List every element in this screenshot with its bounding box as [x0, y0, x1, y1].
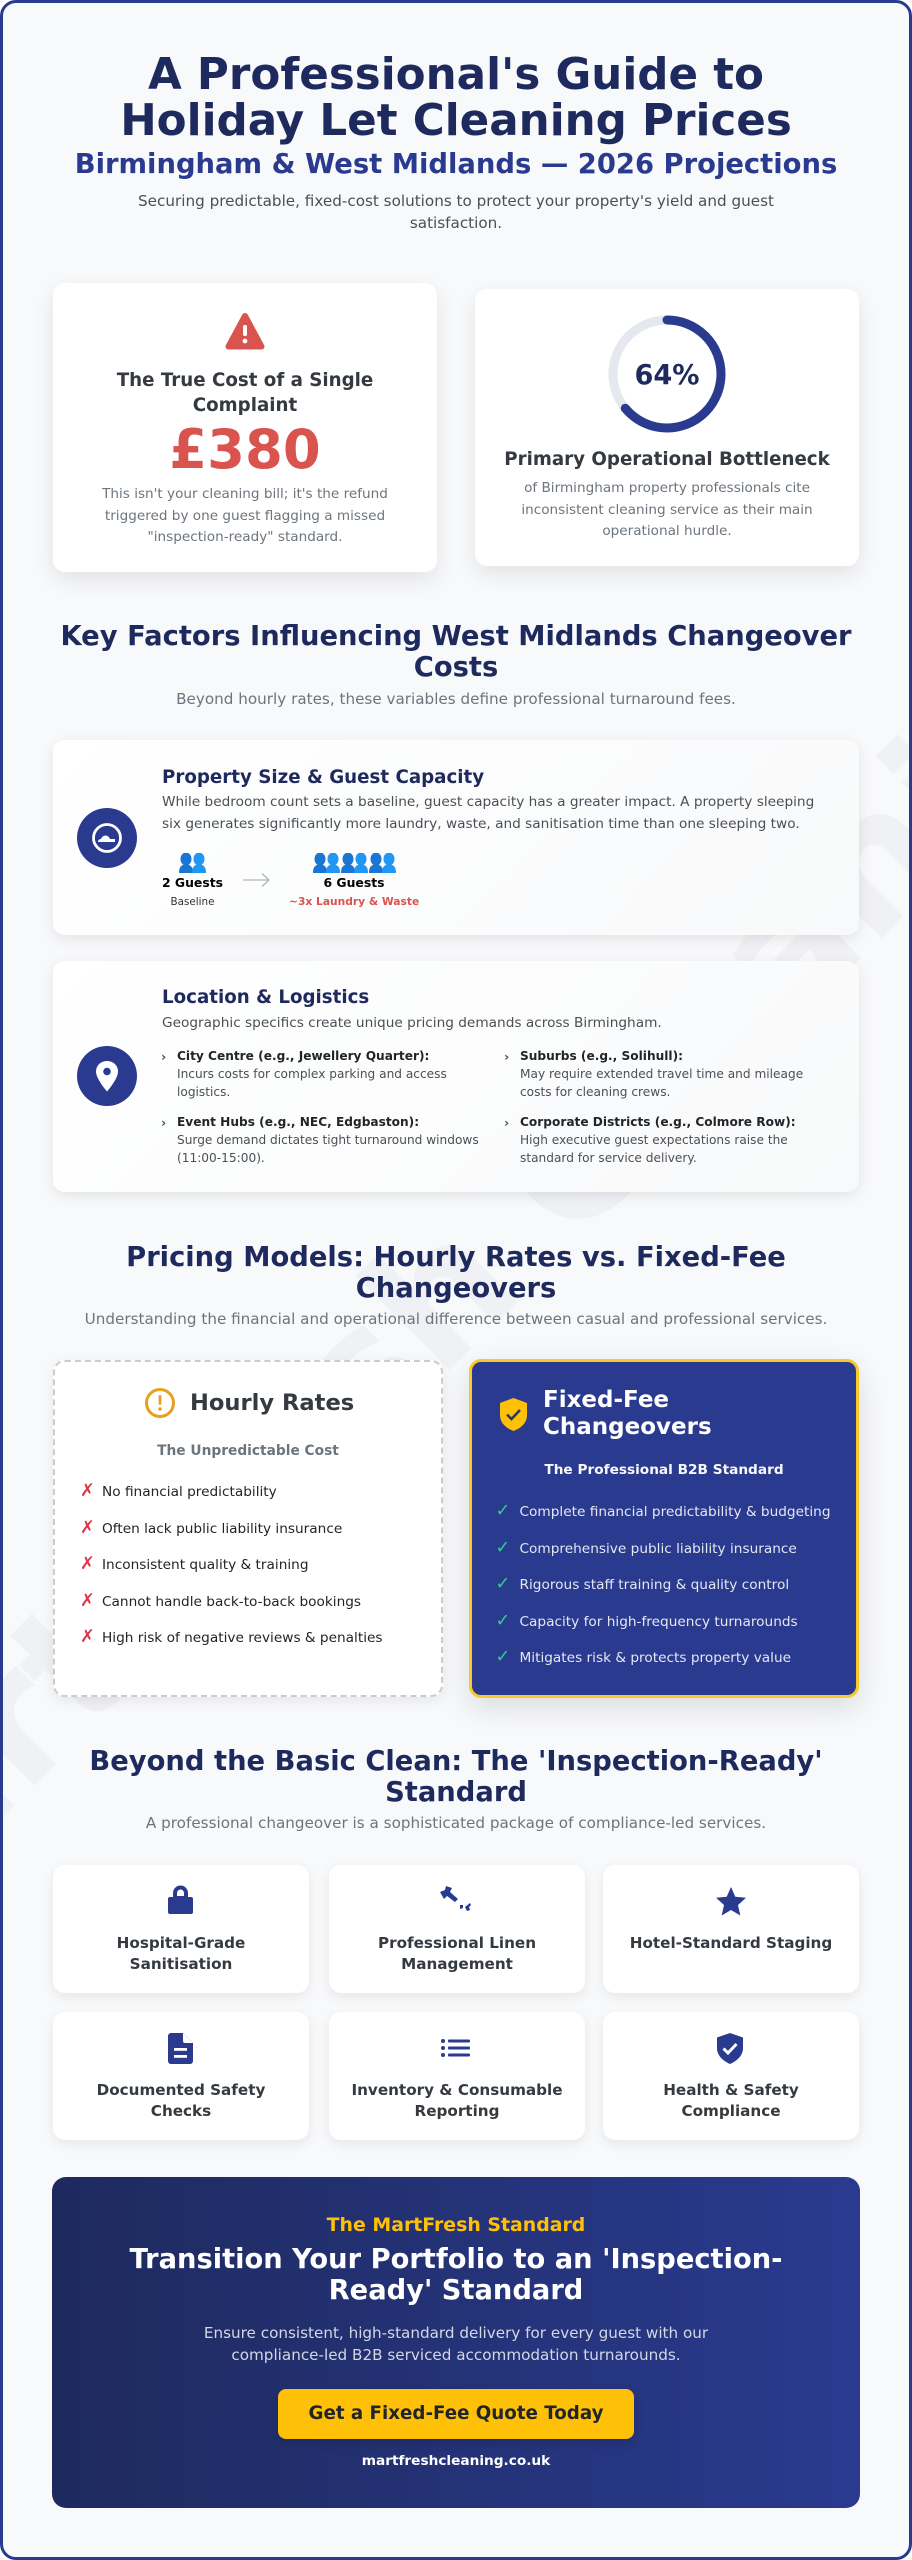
title: Holiday Let Cleaning Prices — [120, 96, 792, 146]
panel: bottleneck — [475, 289, 859, 566]
list: benefits: ✓ — [496, 1574, 510, 1594]
heading: Pricing Models: Hourly Rates vs. Fixed-Fee — [126, 1242, 786, 1273]
icon: bed circle — [77, 808, 137, 868]
card title: Fixed-Fee — [543, 1387, 669, 1413]
factor title: Location & Logistics — [162, 987, 369, 1008]
cta text — [52, 2323, 860, 2366]
subheading: Understanding the financial and operational difference between casual and professional services. — [85, 1310, 827, 1328]
button — [278, 2389, 634, 2439]
subheading: Beyond hourly rates, these variables define professional turnaround fees. — [176, 690, 736, 708]
service label: Documented Safety — [97, 2080, 265, 2098]
heading — [126, 1242, 786, 1304]
section heading: pricing models — [85, 1242, 827, 1328]
list: benefits — [496, 1501, 831, 1667]
donut chart 64%: 64% — [634, 360, 700, 391]
card heading — [116, 370, 373, 416]
bullet: city centre: logistics. — [177, 1085, 230, 1099]
card description: "inspection-ready" standard. — [148, 529, 342, 545]
heading — [60, 621, 852, 682]
card subtitle: The Unpredictable Cost — [157, 1443, 339, 1459]
card title: Hourly Rates — [190, 1390, 354, 1416]
drawback: High risk of negative reviews & penalties — [102, 1630, 383, 1646]
big number: £380 — [169, 418, 321, 481]
panel: location: › — [161, 1050, 166, 1065]
icon: map pin circle — [77, 1046, 137, 1106]
service label: Professional Linen — [378, 1934, 536, 1952]
icon: shield check — [500, 1398, 527, 1431]
header — [75, 50, 837, 232]
panel: location: › — [161, 1116, 166, 1131]
bullet: suburbs: costs for cleaning crews. — [520, 1085, 670, 1099]
label: 2 guests — [162, 875, 223, 908]
service label: Reporting — [415, 2102, 499, 2120]
section heading: inspection ready — [89, 1746, 823, 1832]
label: 2 guests: 2 Guests — [162, 875, 223, 890]
subheading: A professional changeover is a sophisticated package of compliance-led services. — [146, 1814, 766, 1832]
bullet: suburbs — [504, 1049, 803, 1099]
title: A Professional's Guide to — [148, 50, 764, 100]
card description: triggered by one guest flagging a missed — [105, 508, 385, 524]
panel: sanitisation — [53, 1865, 309, 1993]
bullet: corporate: standard for service delivery. — [520, 1151, 697, 1165]
heading: Key Factors Influencing West Midlands Changeover — [60, 621, 852, 652]
drawback: Often lack public liability insurance — [102, 1520, 342, 1536]
website: martfreshcleaning.co.uk — [362, 2453, 550, 2469]
service label: Checks — [151, 2102, 211, 2120]
heading: Standard — [385, 1776, 527, 1808]
panel: staging — [603, 1865, 859, 1993]
service label — [53, 2080, 309, 2122]
list: benefits: ✓ — [496, 1538, 510, 1558]
panel: complaint cost — [53, 283, 437, 572]
subtitle: Birmingham & West Midlands — 2026 Projections — [75, 149, 837, 180]
heading — [89, 1746, 823, 1808]
arrow — [243, 873, 270, 887]
factor text: While bedroom count sets a baseline, guest capacity has a greater impact. A property sleeping — [162, 794, 814, 810]
card description: This isn't your cleaning bill; it's the refund — [102, 486, 388, 502]
cta heading: Transition Your Portfolio to an 'Inspection- — [130, 2244, 782, 2275]
intro text: satisfaction. — [410, 214, 502, 232]
bullet: event hubs: Event Hubs (e.g., NEC, Edgbaston): — [177, 1115, 419, 1129]
cta heading — [52, 2245, 860, 2306]
card description — [521, 480, 813, 539]
list: drawbacks: ✗ — [80, 1481, 95, 1501]
bullet: corporate: High executive guest expectations raise the — [520, 1133, 788, 1147]
bullet: corporate: Corporate Districts (e.g., Colmore Row): — [520, 1115, 796, 1129]
heading: Changeovers — [356, 1272, 556, 1304]
service label — [603, 2080, 859, 2122]
icon: star — [716, 1887, 746, 1916]
panel: location: › — [504, 1050, 509, 1065]
cta heading: Ready' Standard — [329, 2274, 583, 2306]
factor text — [162, 794, 814, 832]
icon: two guests — [179, 853, 206, 873]
factor text: Geographic specifics create unique pricing demands across Birmingham. — [162, 1015, 662, 1031]
benefit: Rigorous staff training & quality control — [520, 1577, 789, 1593]
heading: Costs — [414, 652, 498, 682]
intro text: Securing predictable, fixed-cost solutions to protect your property's yield and guest — [138, 192, 774, 210]
label: 6 guests: ~3x Laundry & Waste — [289, 895, 419, 908]
card heading: Complaint — [193, 394, 297, 416]
card title: Changeovers — [543, 1414, 712, 1440]
service label: Compliance — [681, 2102, 781, 2120]
icon: warning triangle — [226, 313, 264, 350]
service label: Hospital-Grade — [117, 1934, 245, 1952]
icon: exclamation circle — [145, 1388, 175, 1418]
card heading: The True Cost of a Single — [117, 370, 373, 391]
list: drawbacks: ✗ — [80, 1518, 95, 1538]
benefit: Mitigates risk & protects property value — [520, 1650, 791, 1666]
panel: location — [53, 961, 859, 1192]
panel: safety checks — [53, 2012, 309, 2140]
service label: Inventory & Consumable — [351, 2080, 563, 2098]
heading: Beyond the Basic Clean: The 'Inspection-Ready' — [89, 1746, 823, 1777]
donut chart 64% — [608, 316, 726, 432]
bullet: suburbs: May require extended travel time and mileage — [520, 1067, 803, 1081]
label: 2 guests: Baseline — [170, 896, 215, 908]
card description — [102, 486, 388, 545]
bullet: city centre: City Centre (e.g., Jewellery Quarter): — [177, 1049, 429, 1063]
card title — [543, 1387, 712, 1440]
list: benefits: ✓ — [496, 1647, 510, 1667]
card description: of Birmingham property professionals cite — [524, 480, 810, 496]
drawback: Cannot handle back-to-back bookings — [102, 1594, 361, 1610]
cta text: compliance-led B2B serviced accommodation turnarounds. — [231, 2346, 681, 2364]
list: drawbacks — [80, 1481, 383, 1647]
list: drawbacks: ✗ — [80, 1554, 95, 1574]
icon: six guests — [313, 853, 396, 873]
icon: lock — [168, 1884, 193, 1914]
factor text: six generates significantly more laundry, waste, and sanitisation time than one sleeping two. — [162, 816, 800, 832]
bullet: event hubs: (11:00-15:00). — [177, 1151, 265, 1165]
label: 6 guests — [289, 875, 419, 908]
card heading: Primary Operational Bottleneck — [504, 449, 830, 470]
card subtitle: The Professional B2B Standard — [544, 1462, 784, 1478]
button: Get a Fixed-Fee Quote Today — [308, 2403, 603, 2424]
panel: call to action — [52, 2177, 860, 2508]
bullet: event hubs: Surge demand dictates tight turnaround windows — [177, 1133, 479, 1147]
icon: linen — [440, 1886, 472, 1912]
panel: fixed fee — [469, 1359, 859, 1698]
service label — [329, 2080, 585, 2122]
label: 6 guests: 6 Guests — [323, 875, 384, 890]
panel: location: › — [504, 1116, 509, 1131]
intro text — [138, 192, 774, 232]
drawback: Inconsistent quality & training — [102, 1557, 309, 1573]
list: drawbacks: ✗ — [80, 1627, 95, 1647]
service label — [53, 1932, 309, 1975]
card description: operational hurdle. — [602, 523, 732, 539]
drawback: No financial predictability — [102, 1484, 277, 1500]
icon: document — [168, 2033, 193, 2064]
guests comparison — [162, 853, 419, 908]
panel: property size — [53, 740, 859, 935]
card description: inconsistent cleaning service as their main — [521, 502, 813, 518]
benefit: Comprehensive public liability insurance — [520, 1540, 797, 1556]
icon: shield check — [717, 2033, 743, 2064]
service label: Management — [401, 1955, 513, 1973]
benefit: Capacity for high-frequency turnarounds — [520, 1614, 798, 1630]
panel: linen — [329, 1865, 585, 1993]
factor title: Property Size & Guest Capacity — [162, 767, 484, 788]
list: benefits: ✓ — [496, 1610, 510, 1630]
panel: hourly rates — [53, 1360, 443, 1697]
bullet: city centre — [161, 1049, 447, 1099]
cta text: Ensure consistent, high-standard delivery for every guest with our — [204, 2324, 708, 2342]
bullet: city centre: Incurs costs for complex parking and access — [177, 1067, 447, 1081]
list: drawbacks: ✗ — [80, 1590, 95, 1610]
icon: list — [441, 2039, 470, 2057]
bullet: suburbs: Suburbs (e.g., Solihull): — [520, 1049, 683, 1063]
service label: Hotel-Standard Staging — [630, 1934, 832, 1952]
section heading: key factors — [60, 621, 852, 708]
title — [120, 50, 792, 146]
service label — [329, 1932, 585, 1975]
bullet: corporate — [504, 1115, 796, 1165]
service label: Health & Safety — [663, 2080, 799, 2098]
eyebrow: The MartFresh Standard — [327, 2214, 585, 2236]
bullet: event hubs — [161, 1115, 479, 1165]
benefit: Complete financial predictability & budgeting — [520, 1504, 831, 1520]
panel: health and safety — [603, 2012, 859, 2140]
service label: Sanitisation — [130, 1955, 232, 1973]
panel: inventory — [329, 2012, 585, 2140]
list: benefits: ✓ — [496, 1501, 510, 1521]
